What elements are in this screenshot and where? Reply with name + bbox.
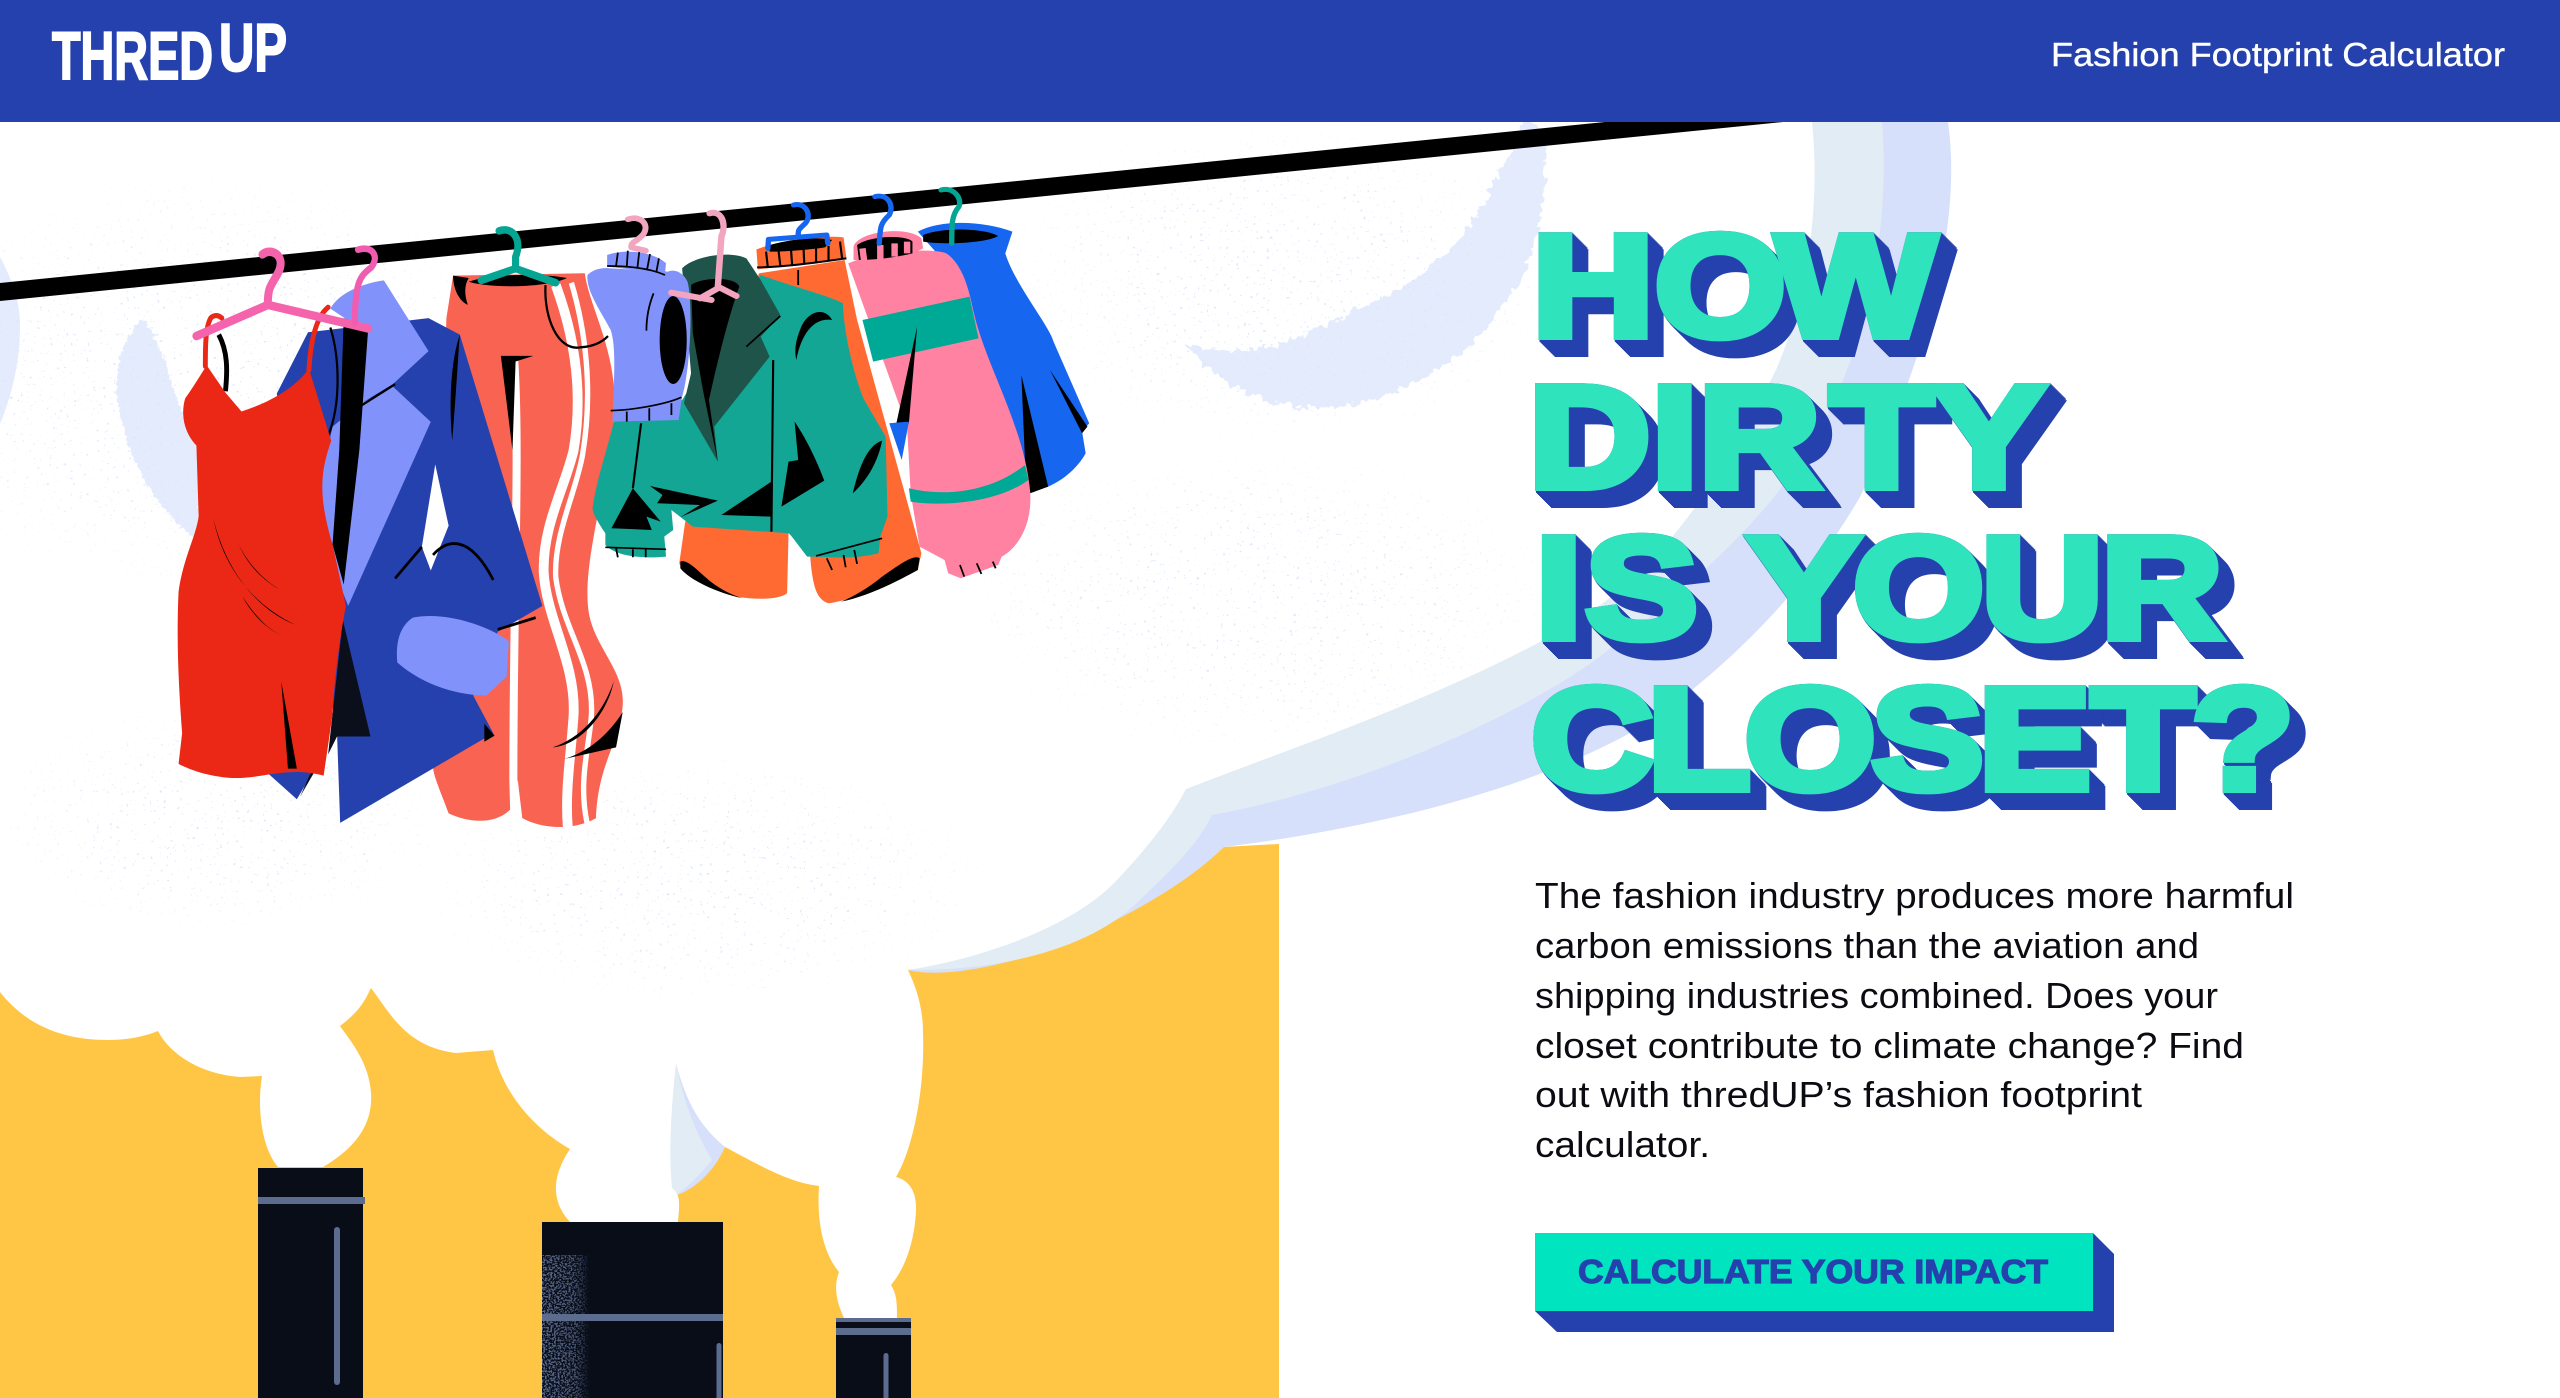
clothes rail <box>0 122 1783 301</box>
body paragraph: carbon emissions than the aviation and <box>1535 925 2199 966</box>
pale pink hanger 1 <box>628 218 646 251</box>
headline <box>1528 206 2295 820</box>
hangers on right-hand garments <box>628 189 960 300</box>
pale crescent: upper right of cloud <box>1184 122 1544 408</box>
logo: UP <box>219 10 287 86</box>
pink hanger 2 <box>355 249 375 323</box>
chimney 2 <box>542 1222 723 1398</box>
headline: HOW <box>1532 206 1936 367</box>
body paragraph: shipping industries combined. Does your <box>1535 975 2218 1016</box>
body paragraph: out with thredUP’s fashion footprint <box>1535 1074 2142 1115</box>
headline: IS YOUR <box>1535 508 2223 669</box>
blue hanger 1 <box>768 204 828 248</box>
garments group A: right-hand clothes <box>679 223 1089 603</box>
pale crescent: far left <box>0 257 20 424</box>
pink sweater <box>848 231 1030 578</box>
pale crescent: behind dress <box>117 318 199 542</box>
body paragraph: The fashion industry produces more harmful <box>1535 875 2294 916</box>
lavender vest <box>587 251 690 422</box>
garments group B: green jacket and lavender vest <box>587 251 887 570</box>
body paragraph <box>1535 875 2294 1165</box>
logo: THRED <box>52 18 213 94</box>
headline: CLOSET? <box>1531 659 2295 820</box>
red dress <box>178 307 371 778</box>
pale pink hanger 2 <box>671 213 736 300</box>
call-to-action button <box>1535 1233 2114 1332</box>
blue blazer <box>268 280 542 823</box>
chimney 3 <box>836 1318 911 1398</box>
blue hanger 2 <box>875 196 891 243</box>
header bar <box>0 0 2560 122</box>
garments group C: blazer and red dress <box>178 230 556 823</box>
call-to-action button: CALCULATE YOUR IMPACT <box>1578 1253 2048 1290</box>
nav link: Fashion Footprint Calculator <box>2051 36 2505 73</box>
smoke cloud <box>0 122 1951 1318</box>
green jacket <box>593 255 887 570</box>
headline: DIRTY <box>1528 357 2046 518</box>
teal hanger <box>481 230 556 283</box>
body paragraph: calculator. <box>1535 1124 1710 1165</box>
pink hanger 1 <box>196 252 368 336</box>
orange shorts <box>679 237 921 603</box>
skirt <box>918 223 1089 493</box>
chimney 1 <box>258 1168 365 1398</box>
teal hanger 2 <box>941 189 960 243</box>
body paragraph: closet contribute to climate change? Find <box>1535 1025 2244 1066</box>
speckle texture on cloud <box>0 122 1600 1022</box>
yellow sky panel <box>0 838 1279 1398</box>
track pants <box>433 273 623 828</box>
